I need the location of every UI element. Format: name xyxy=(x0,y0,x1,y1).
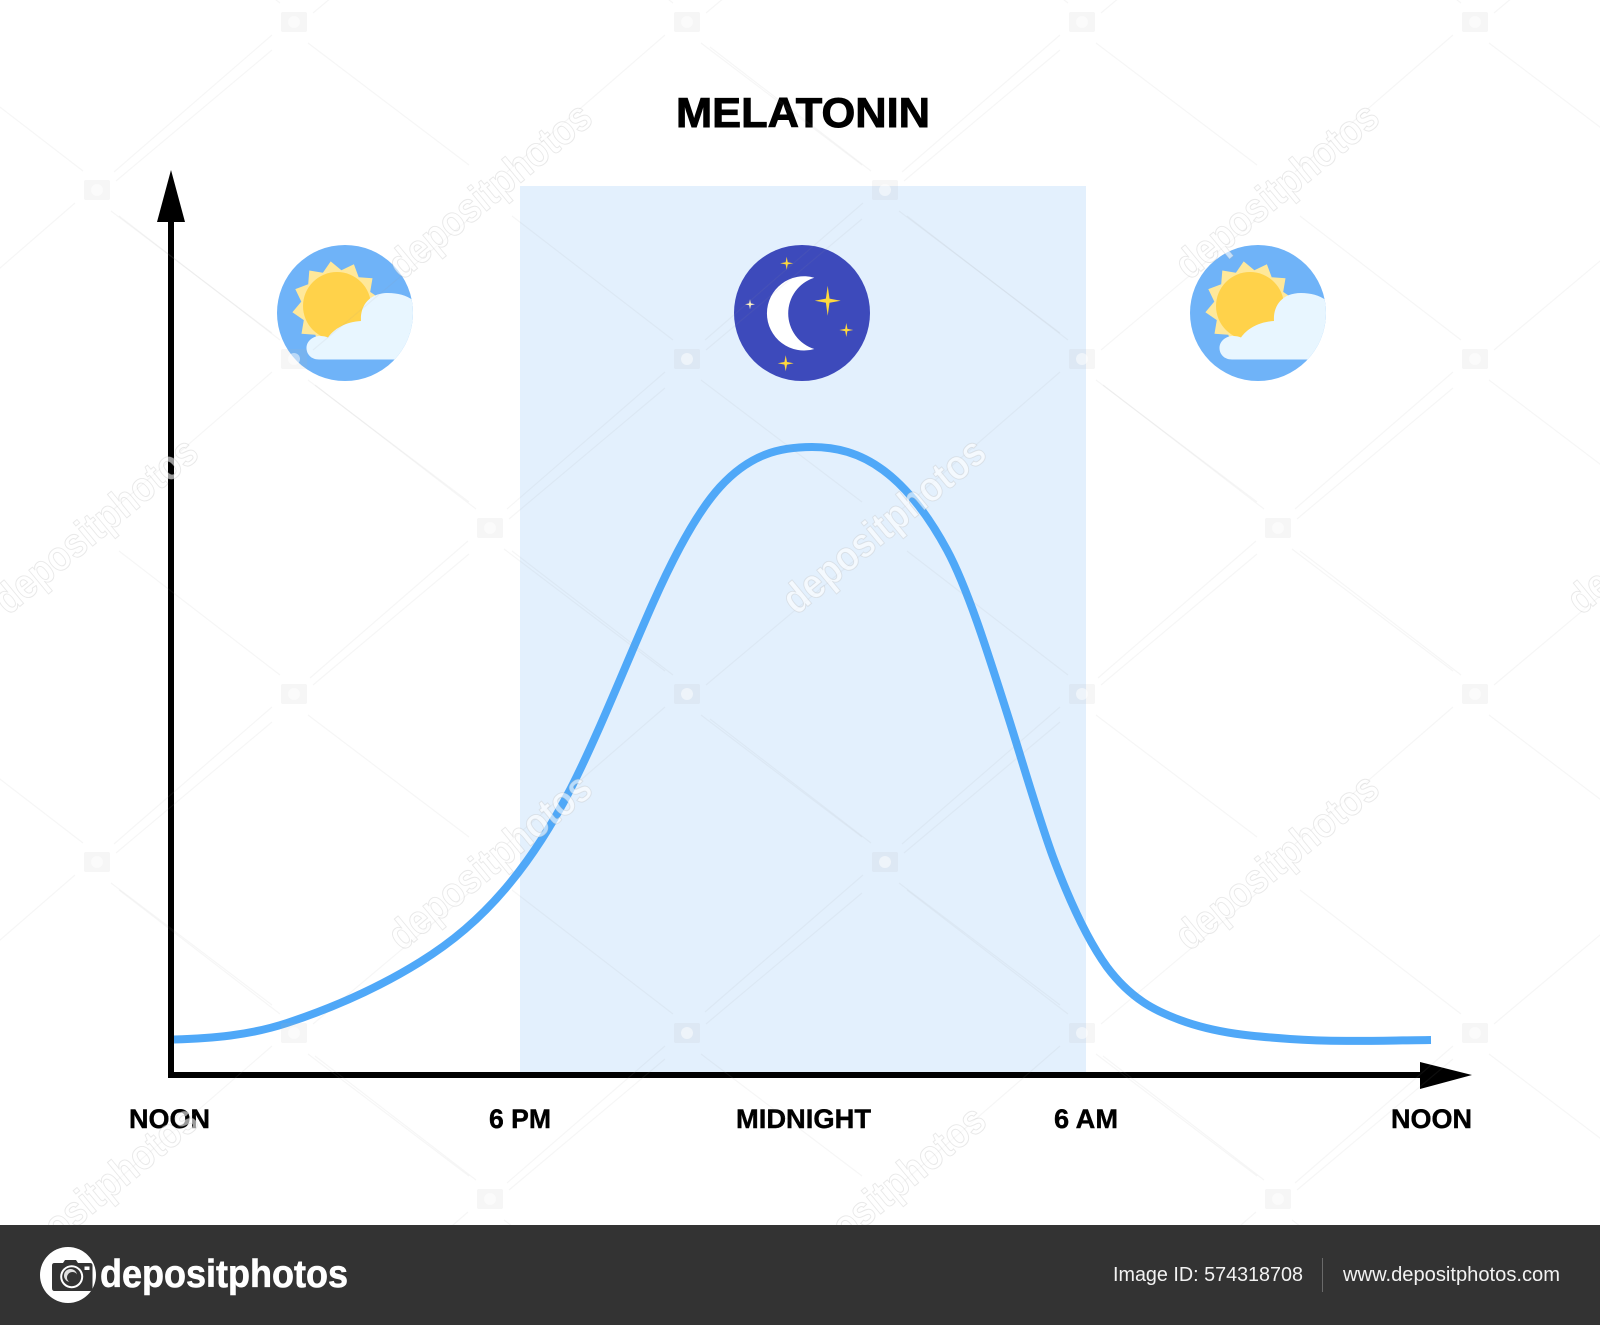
y axis arrow xyxy=(157,170,185,1078)
label: noon start: NOON xyxy=(129,1104,210,1134)
night period panel xyxy=(520,186,1086,1073)
watermark overlay: depositphotos xyxy=(378,92,601,288)
watermark overlay: depositphotos xyxy=(1165,763,1388,959)
icon: day sun and cloud left xyxy=(277,245,425,381)
image id: Image ID: 574318708 xyxy=(1113,1264,1303,1286)
watermark overlay: depositphotos xyxy=(1165,92,1388,288)
label: midnight: MIDNIGHT xyxy=(736,1104,871,1134)
icon: night moon and stars xyxy=(734,245,870,381)
logo wordmark: depositphotos xyxy=(100,1253,348,1296)
footer bar xyxy=(0,1225,1600,1325)
label: noon end: NOON xyxy=(1391,1104,1472,1134)
icon: day sun and cloud right xyxy=(1190,245,1338,381)
icon: camera logo xyxy=(40,1247,96,1303)
website url: www.depositphotos.com xyxy=(1342,1264,1560,1286)
label: 6 am: 6 AM xyxy=(1054,1104,1118,1134)
watermark overlay: depositphotos xyxy=(378,763,601,959)
watermark overlay: depositphotos xyxy=(772,427,995,623)
label: 6 pm: 6 PM xyxy=(489,1104,551,1134)
x axis arrow xyxy=(168,1062,1472,1089)
melatonin level curve xyxy=(174,447,1431,1041)
watermark overlay: depositphotos xyxy=(772,1095,995,1291)
x axis time labels xyxy=(129,1104,1472,1134)
title: MELATONIN xyxy=(676,89,930,136)
